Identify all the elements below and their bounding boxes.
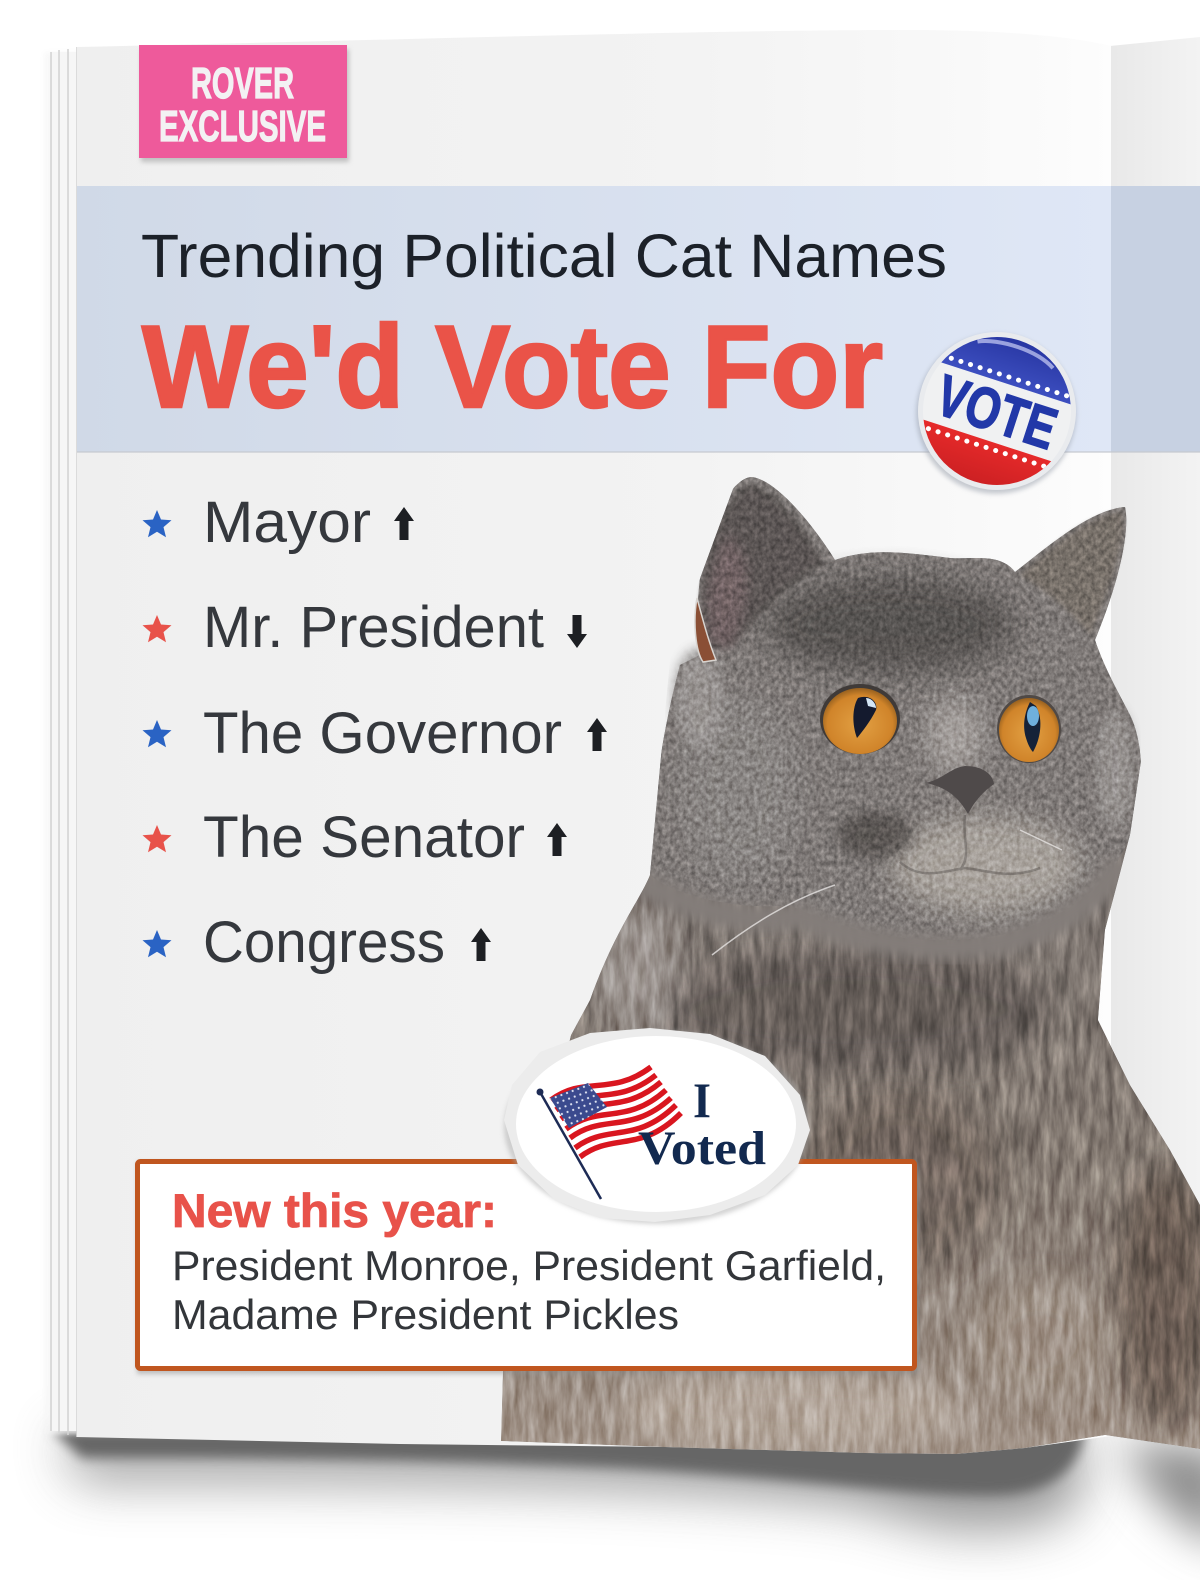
callout names: President Monroe, President Garfield, (172, 1242, 886, 1289)
callout: new this year (137, 1162, 919, 1374)
cat left ear (701, 484, 825, 650)
cat nose and mouth (712, 766, 1062, 955)
cat left eye (820, 684, 900, 754)
flag (536, 1067, 681, 1199)
cat right eye (997, 695, 1061, 763)
callout heading: New this year: (172, 1184, 497, 1237)
callout names: Madame President Pickles (172, 1291, 679, 1338)
list item: Mr. President: Mr. President (203, 595, 544, 660)
vote button (914, 332, 1078, 496)
heading band (77, 186, 1200, 453)
badge: Rover Exclusive: ROVER (191, 59, 294, 108)
sticker text: I (693, 1072, 711, 1128)
list item: Mayor (142, 490, 414, 555)
cat body (501, 800, 1200, 1454)
I Voted sticker (504, 1028, 810, 1224)
list item: The Governor: The Governor (203, 701, 562, 766)
drop shadow under magazine (52, 1430, 1200, 1550)
title: We'd Vote For (142, 301, 883, 432)
cat photo illustration (501, 477, 1200, 1454)
list item: The Senator: The Senator (203, 805, 525, 870)
vote text: VOTE (928, 363, 1065, 462)
list item: Congress: Congress (203, 910, 445, 975)
callout names (172, 1242, 886, 1338)
badge: Rover Exclusive: EXCLUSIVE (159, 102, 326, 151)
stacked page edges (44, 47, 80, 1437)
title (141, 222, 947, 432)
sticker text (638, 1072, 766, 1175)
right page (1105, 37, 1200, 1449)
list of trending names (142, 490, 607, 975)
cat head (650, 477, 1141, 940)
title: Trending Political Cat Names (141, 222, 947, 290)
neck ruff blending head into body (640, 860, 1120, 947)
cat ear fold (695, 598, 716, 662)
left page (77, 30, 1111, 1454)
cat right ear (1020, 512, 1123, 635)
sticker text: Voted (638, 1122, 766, 1175)
badge: Rover Exclusive (139, 45, 349, 162)
list item: Mayor: Mayor (203, 490, 371, 555)
